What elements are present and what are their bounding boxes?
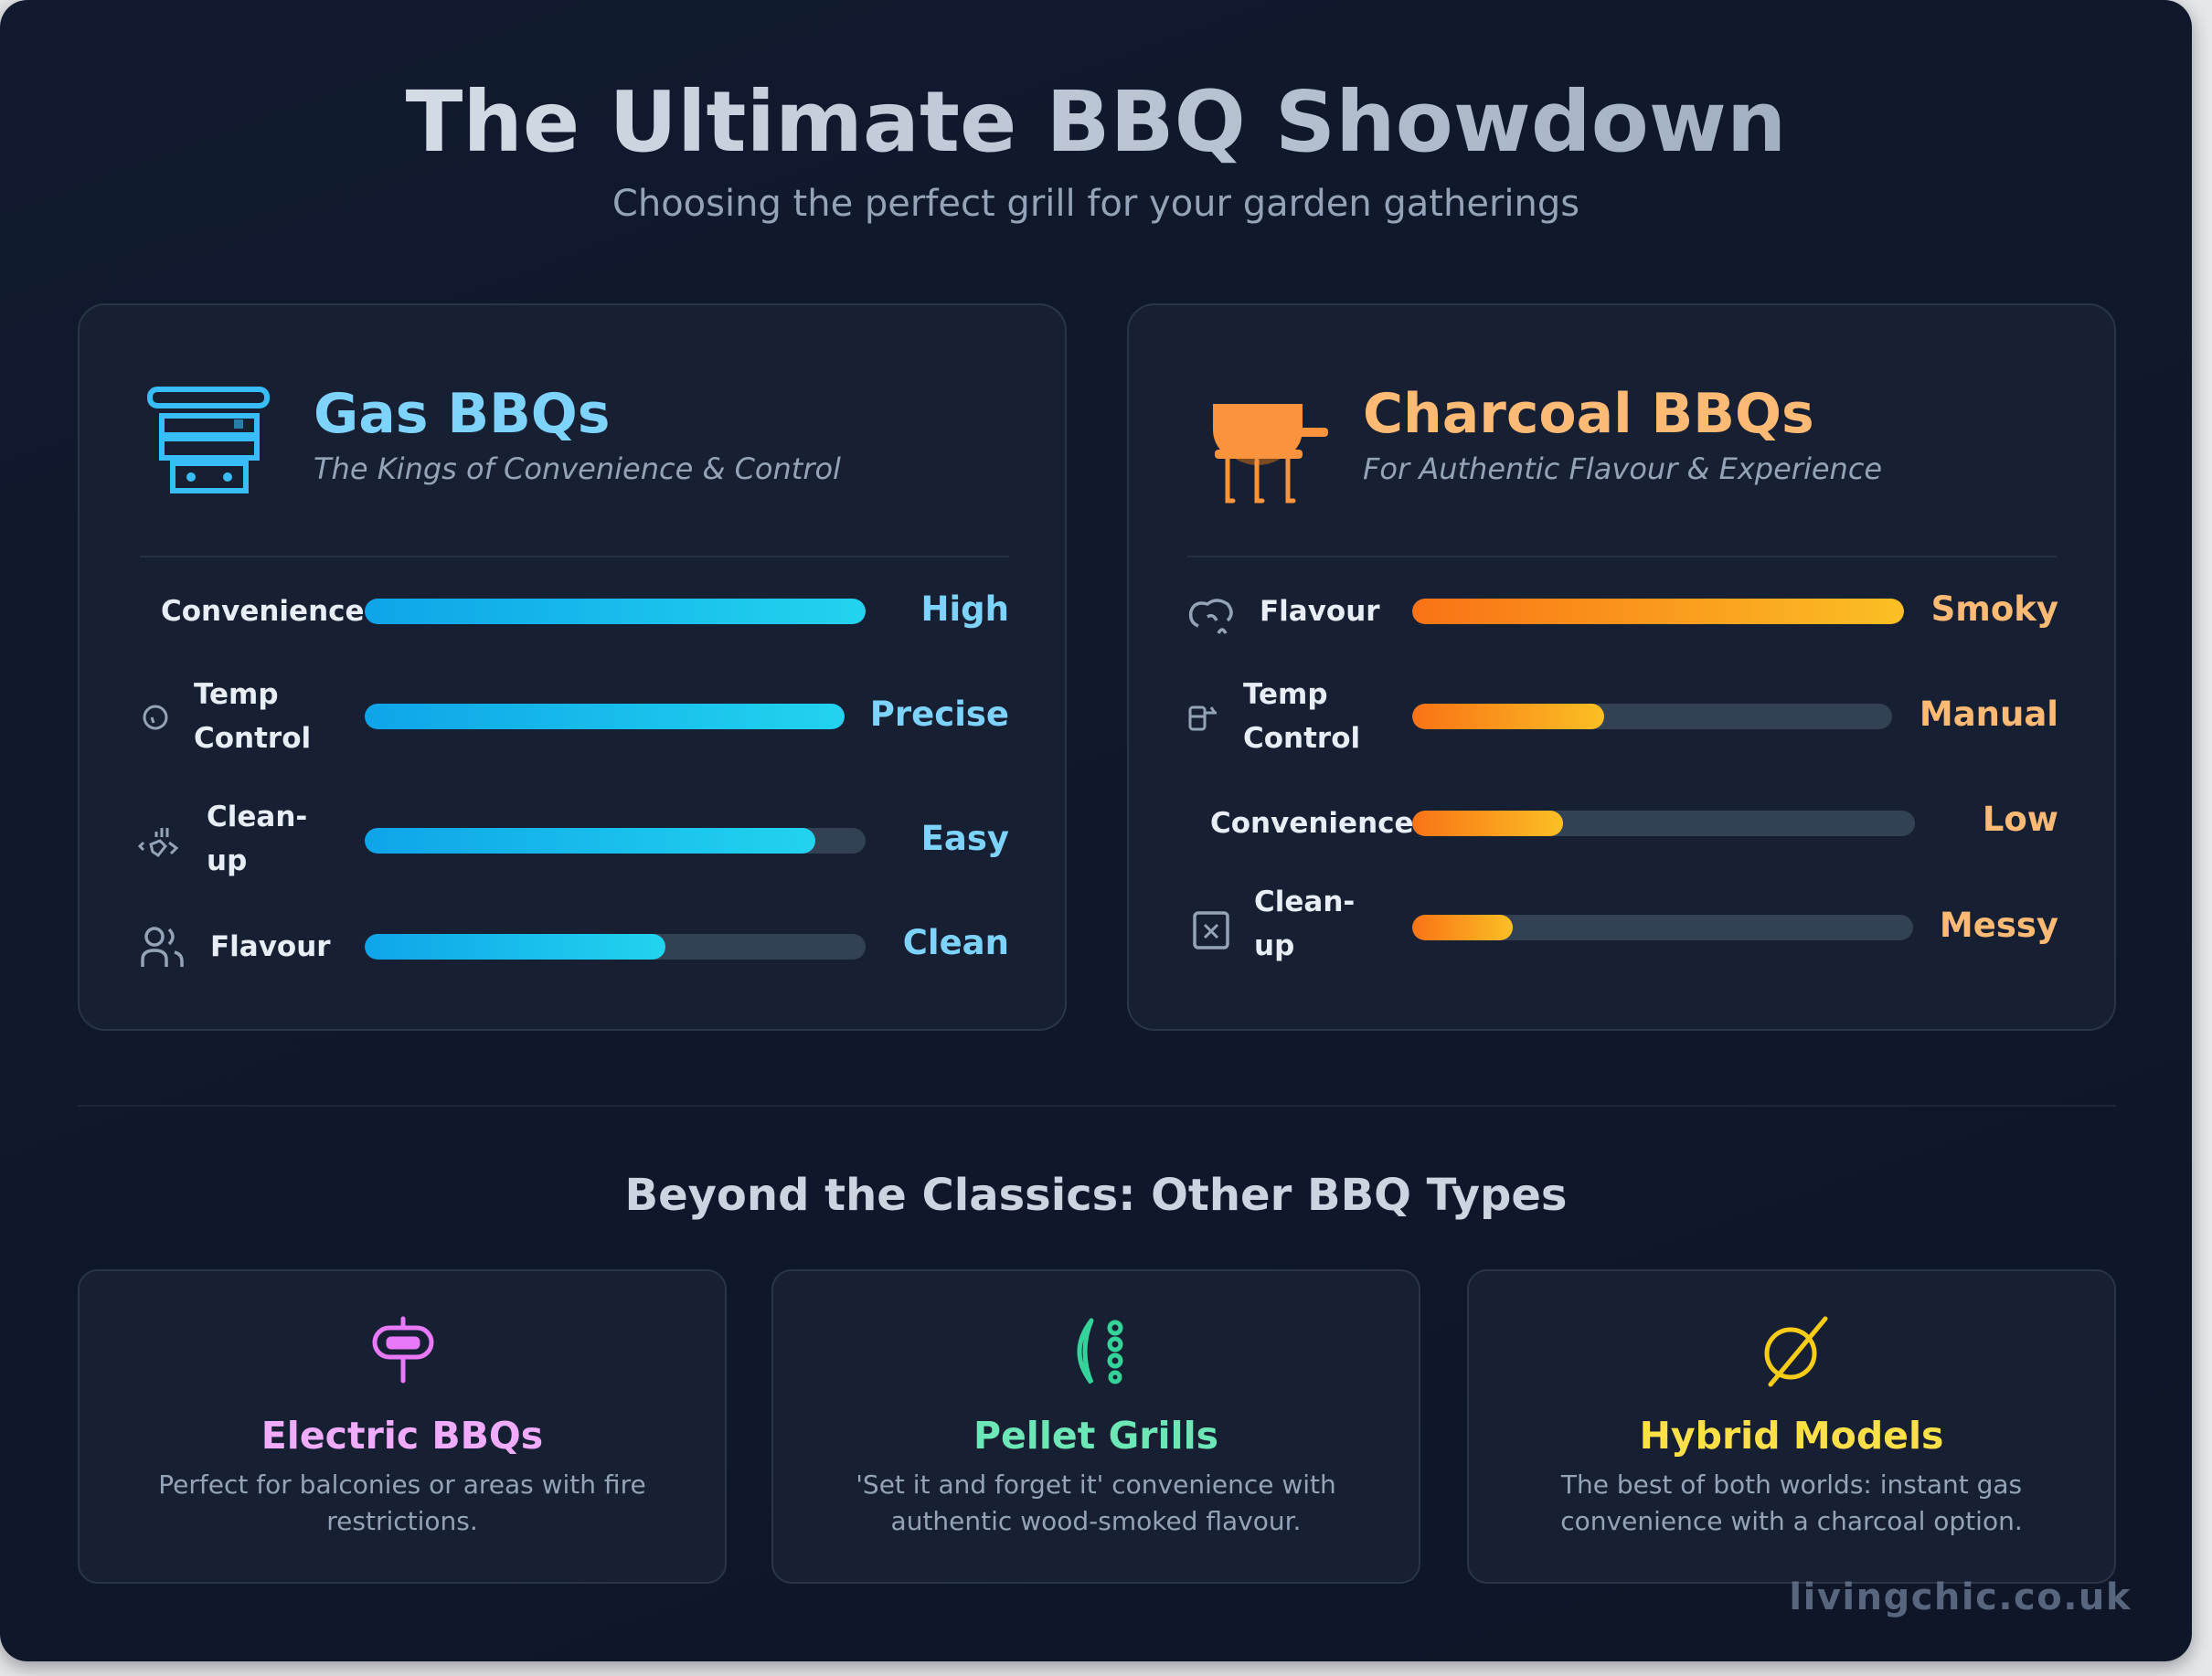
row: clean-up: Clean-: [1254, 886, 1355, 918]
icon: kettle grill: [1213, 404, 1328, 503]
row: temp control: [1188, 678, 2058, 755]
row: flavour: [141, 923, 1009, 967]
row: clean-up: up: [207, 844, 247, 877]
text: 'Set it and forget it' convenience with authentic wood-smoked flavour.: [856, 1469, 1336, 1536]
title: [0, 68, 2192, 177]
row: flavour: [1188, 589, 2058, 634]
icon: dial: [143, 705, 168, 729]
row: temp control: Manual: [1920, 695, 2058, 734]
row: flavour: Clean: [903, 923, 1009, 962]
row: clean-up: up: [1254, 929, 1294, 962]
subheading: The Kings of Convenience & Control: [314, 451, 841, 486]
row: flavour: Flavour: [210, 930, 331, 963]
row: flavour: Flavour: [1260, 595, 1380, 628]
subheading: For Authentic Flavour & Experience: [1363, 451, 1882, 486]
card: hybrid: [1467, 1269, 2116, 1584]
subtitle: Choosing the perfect grill for your garden gatherings: [612, 183, 1579, 225]
row: convenience: [1210, 800, 2058, 840]
heading: Charcoal BBQs: Charcoal BBQs: [1363, 382, 1814, 446]
row: temp control: Temp: [194, 678, 279, 711]
icon: cloud: [1188, 599, 1233, 634]
row: temp control: Precise: [870, 695, 1009, 734]
row: flavour: Smoky: [1931, 589, 2058, 629]
row: temp control: Control: [1243, 722, 1360, 755]
row: temp control: Temp: [1243, 678, 1328, 711]
row: convenience: Low: [1983, 800, 2058, 839]
row: clean-up: Clean-: [207, 801, 307, 833]
row: convenience: Convenience: [161, 595, 365, 628]
card: electric: [78, 1269, 727, 1584]
icon: people: [141, 927, 184, 967]
section heading: Beyond the Classics: Other BBQ Types: [625, 1170, 1567, 1221]
icon: pellet: [1077, 1318, 1122, 1384]
text: The best of both worlds: instant gas convenience with a charcoal option.: [1560, 1469, 2023, 1536]
row: temp control: [143, 678, 1009, 755]
row: clean-up: Messy: [1940, 906, 2058, 945]
icon: gas grill: [147, 387, 270, 493]
row: clean-up: [1193, 886, 2058, 962]
row: temp control: Control: [194, 722, 311, 755]
row: convenience: Convenience: [1210, 807, 1414, 840]
icon: sparkle: [138, 828, 179, 857]
row: clean-up: [138, 801, 1009, 877]
row: convenience: High: [921, 589, 1009, 629]
icon: x box: [1193, 911, 1229, 949]
heading: Hybrid Models: Hybrid Models: [1640, 1414, 1943, 1458]
heading: Pellet Grills: Pellet Grills: [973, 1414, 1218, 1458]
text: Perfect for balconies or areas with fire restrictions.: [158, 1469, 646, 1536]
panel: charcoal: [1127, 303, 2116, 1031]
card: pellet: [771, 1269, 1420, 1584]
row: convenience: [161, 589, 1009, 629]
heading: Gas BBQs: Gas BBQs: [314, 382, 611, 446]
icon: fuel: [1188, 705, 1217, 731]
heading: Electric BBQs: Electric BBQs: [261, 1414, 543, 1458]
row: clean-up: Easy: [921, 819, 1009, 858]
panel: gas: [78, 303, 1067, 1031]
icon: hybrid: [1764, 1316, 1828, 1387]
watermark: livingchic.co.uk: [1789, 1576, 2132, 1618]
title: The Ultimate BBQ Showdown: [406, 73, 1786, 171]
icon: electric: [373, 1316, 433, 1384]
